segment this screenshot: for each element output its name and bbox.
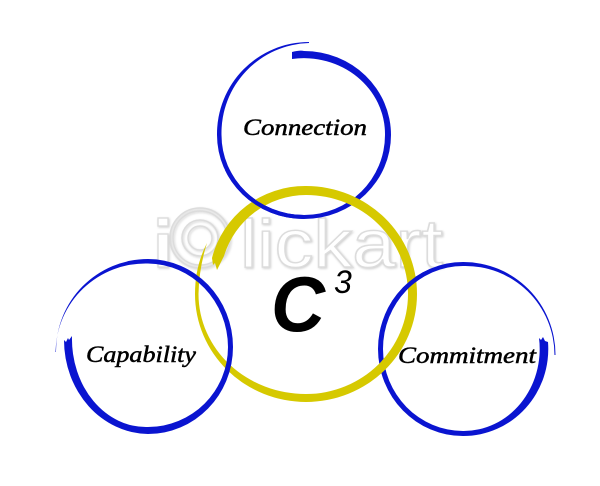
C3 circle diagram [56, 42, 556, 436]
ring: yellow C3 [195, 186, 417, 402]
center title: C3: 3 [334, 264, 352, 300]
ring: Capability [56, 259, 233, 434]
label: Connection: Connection [243, 115, 367, 140]
label: Commitment: Commitment [398, 343, 537, 368]
center title: C3: C [271, 260, 327, 348]
ring: Connection [217, 42, 391, 219]
connection ring overlap [225, 170, 304, 219]
ring: Commitment [378, 262, 556, 436]
center title: C3 [271, 260, 352, 348]
watermark: lickart [240, 206, 443, 282]
commitment ring overlap [384, 268, 430, 315]
watermark [158, 206, 443, 282]
label: Capability: Capability [86, 342, 197, 367]
